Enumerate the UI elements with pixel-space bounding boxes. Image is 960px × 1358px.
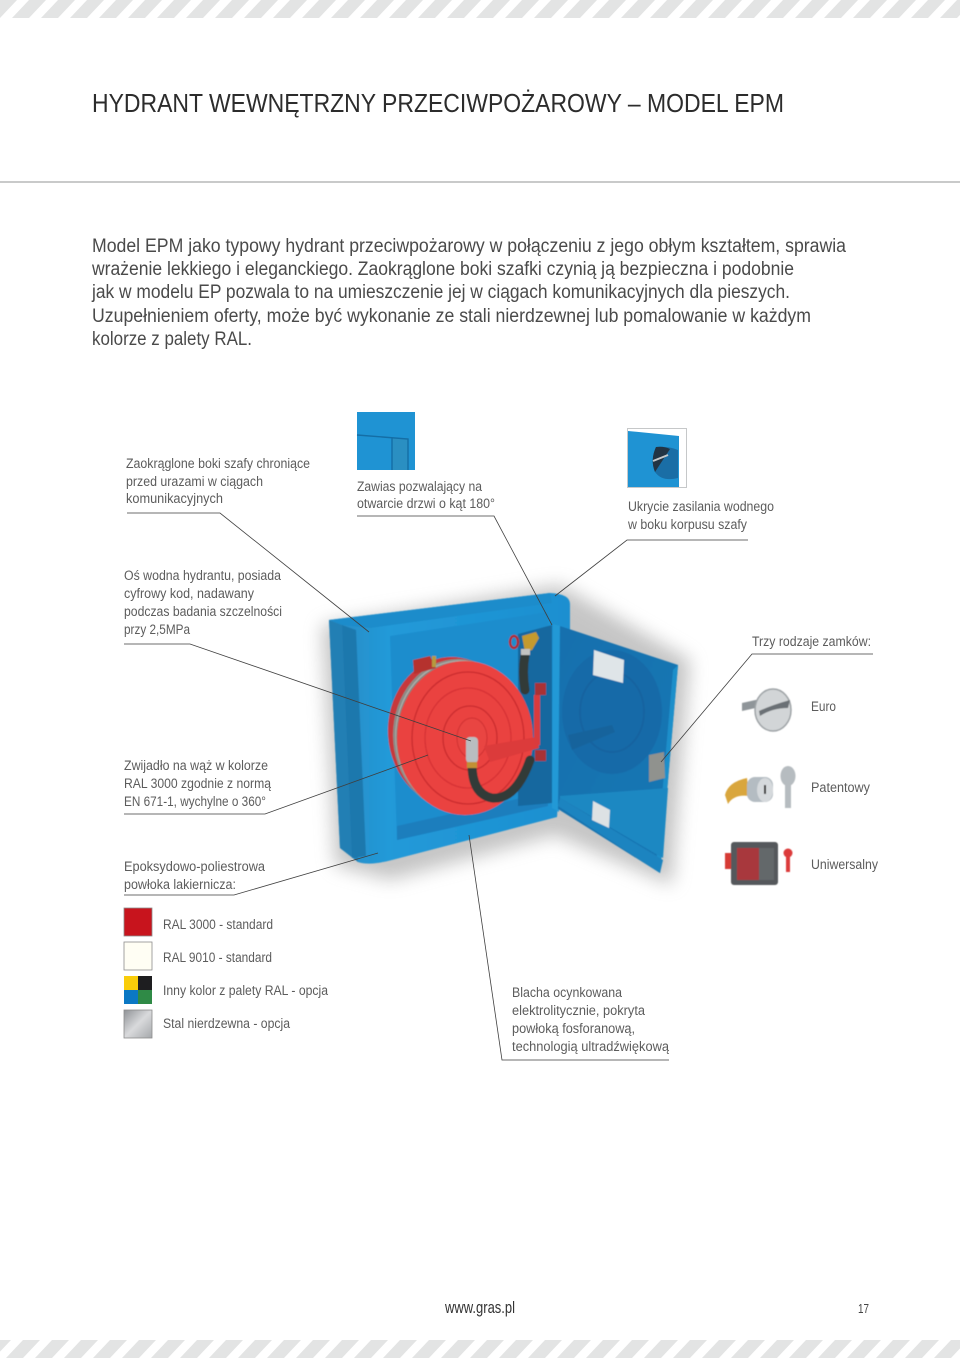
icon: universal lock	[725, 842, 792, 885]
title: HYDRANT WEWNĘTRZNY PRZECIWPOŻAROWY – MODEL EPM	[92, 88, 784, 118]
intro paragraph: kolorze z palety RAL.	[92, 329, 252, 350]
callout: galvanised sheet: powłoką fosforanową,	[512, 1021, 635, 1036]
callout: hinge: Zawias pozwalający na	[357, 479, 482, 494]
legend labels: RAL 3000 - standard	[163, 917, 273, 932]
callout: coating: Epoksydowo-poliestrowa	[124, 859, 265, 874]
door label bottom	[592, 801, 610, 828]
callout: water axis: cyfrowy kod, nadawany	[124, 586, 254, 601]
callout: water supply: Ukrycie zasilania wodnego	[628, 499, 774, 514]
callout: hinge	[357, 479, 495, 511]
text: Patentowy	[811, 780, 870, 795]
legend labels	[163, 917, 328, 1031]
leader lines	[124, 513, 873, 1060]
door lock	[649, 752, 665, 782]
intro paragraph: jak w modelu EP pozwala to na umieszczenie jej w ciągach komunikacyjnych dla pieszych.	[91, 282, 790, 303]
callout: reel colour: RAL 3000 zgodnie z normą	[124, 776, 271, 791]
hydrant cabinet illustration	[329, 593, 678, 873]
top hazard stripe band	[0, 0, 960, 18]
text: Euro	[811, 699, 836, 714]
callout: reel colour	[124, 758, 271, 809]
intro paragraph: Model EPM jako typowy hydrant przeciwpożarowy w połączeniu z jego obłym kształtem, sprawia	[92, 236, 846, 257]
callout: coating: powłoka lakiernicza:	[124, 877, 236, 892]
text: Uniwersalny	[811, 857, 878, 872]
open door edge	[552, 624, 561, 812]
bottom hazard stripe band	[0, 1340, 960, 1358]
intro paragraph	[91, 236, 846, 350]
door rim	[656, 665, 678, 873]
icon: patent lock	[725, 766, 796, 808]
red rim behind hose	[383, 653, 523, 811]
callout: reel colour: EN 671-1, wychylne o 360°	[124, 794, 266, 809]
callout: rounded sides: przed urazami w ciągach	[126, 474, 263, 489]
reel bracket	[484, 683, 546, 762]
page number: 17	[858, 1302, 869, 1316]
callout: coating	[124, 859, 265, 892]
swatch: RAL 3000	[124, 908, 152, 936]
callout: hinge: otwarcie drzwi o kąt 180°	[357, 496, 495, 511]
door label top	[593, 650, 624, 683]
icon: Euro lock	[742, 689, 791, 731]
swatch: RAL 9010	[124, 942, 152, 970]
cabinet recess	[390, 612, 548, 840]
footer website: www.gras.pl	[444, 1298, 515, 1317]
cabinet shadow	[322, 585, 690, 885]
callout: rounded sides	[126, 456, 310, 506]
callout: galvanised sheet: Blacha ocynkowana	[512, 985, 622, 1000]
callout: water axis	[124, 568, 282, 637]
thumbnail: hinge detail	[357, 412, 415, 470]
callout: water axis: podczas badania szczelności	[124, 604, 282, 619]
black supply hose	[472, 655, 530, 798]
open door	[558, 626, 678, 873]
red reel disc	[397, 661, 533, 815]
door lower reflection	[560, 788, 668, 858]
locks heading: Trzy rodzaje zamków:	[752, 634, 871, 649]
legend labels: RAL 9010 - standard	[163, 950, 272, 965]
brass valve	[510, 632, 539, 655]
callout: water supply	[627, 499, 774, 532]
cabinet body	[329, 593, 570, 864]
swatch: other RAL	[124, 976, 152, 1004]
callout: galvanised sheet: technologią ultradźwiękową	[512, 1039, 669, 1054]
callout: water supply: w boku korpusu szafy	[627, 517, 747, 532]
thumbnail: hidden water supply	[628, 428, 686, 488]
callout: galvanised sheet	[512, 985, 669, 1054]
callout: reel colour: Zwijadło na wąż w kolorze	[124, 758, 268, 773]
callout: water axis: przy 2,5MPa	[124, 622, 190, 637]
swatch: stainless steel	[124, 1010, 152, 1038]
callout: water axis: Oś wodna hydrantu, posiada	[124, 568, 281, 583]
grey fire hose on reel	[393, 659, 527, 812]
intro paragraph: wrażenie lekkiego i eleganckiego. Zaokrąglone boki szafki czynią ją bezpieczna i podobnie	[91, 259, 794, 280]
hose nozzle	[413, 656, 436, 674]
legend labels: Inny kolor z palety RAL - opcja	[163, 983, 328, 998]
callout: galvanised sheet: elektrolitycznie, pokryta	[512, 1003, 645, 1018]
chrome fitting	[466, 737, 478, 768]
callout: rounded sides: komunikacyjnych	[126, 491, 223, 506]
reel reflection in door	[562, 650, 662, 774]
legend labels: Stal nierdzewna - opcja	[163, 1016, 290, 1031]
intro paragraph: Uzupełnieniem oferty, może być wykonanie ze stali nierdzewnej lub pomalowanie w każdym	[92, 306, 811, 327]
colour legend	[124, 908, 328, 1038]
callout: rounded sides: Zaokrąglone boki szafy chroniące	[126, 456, 310, 471]
